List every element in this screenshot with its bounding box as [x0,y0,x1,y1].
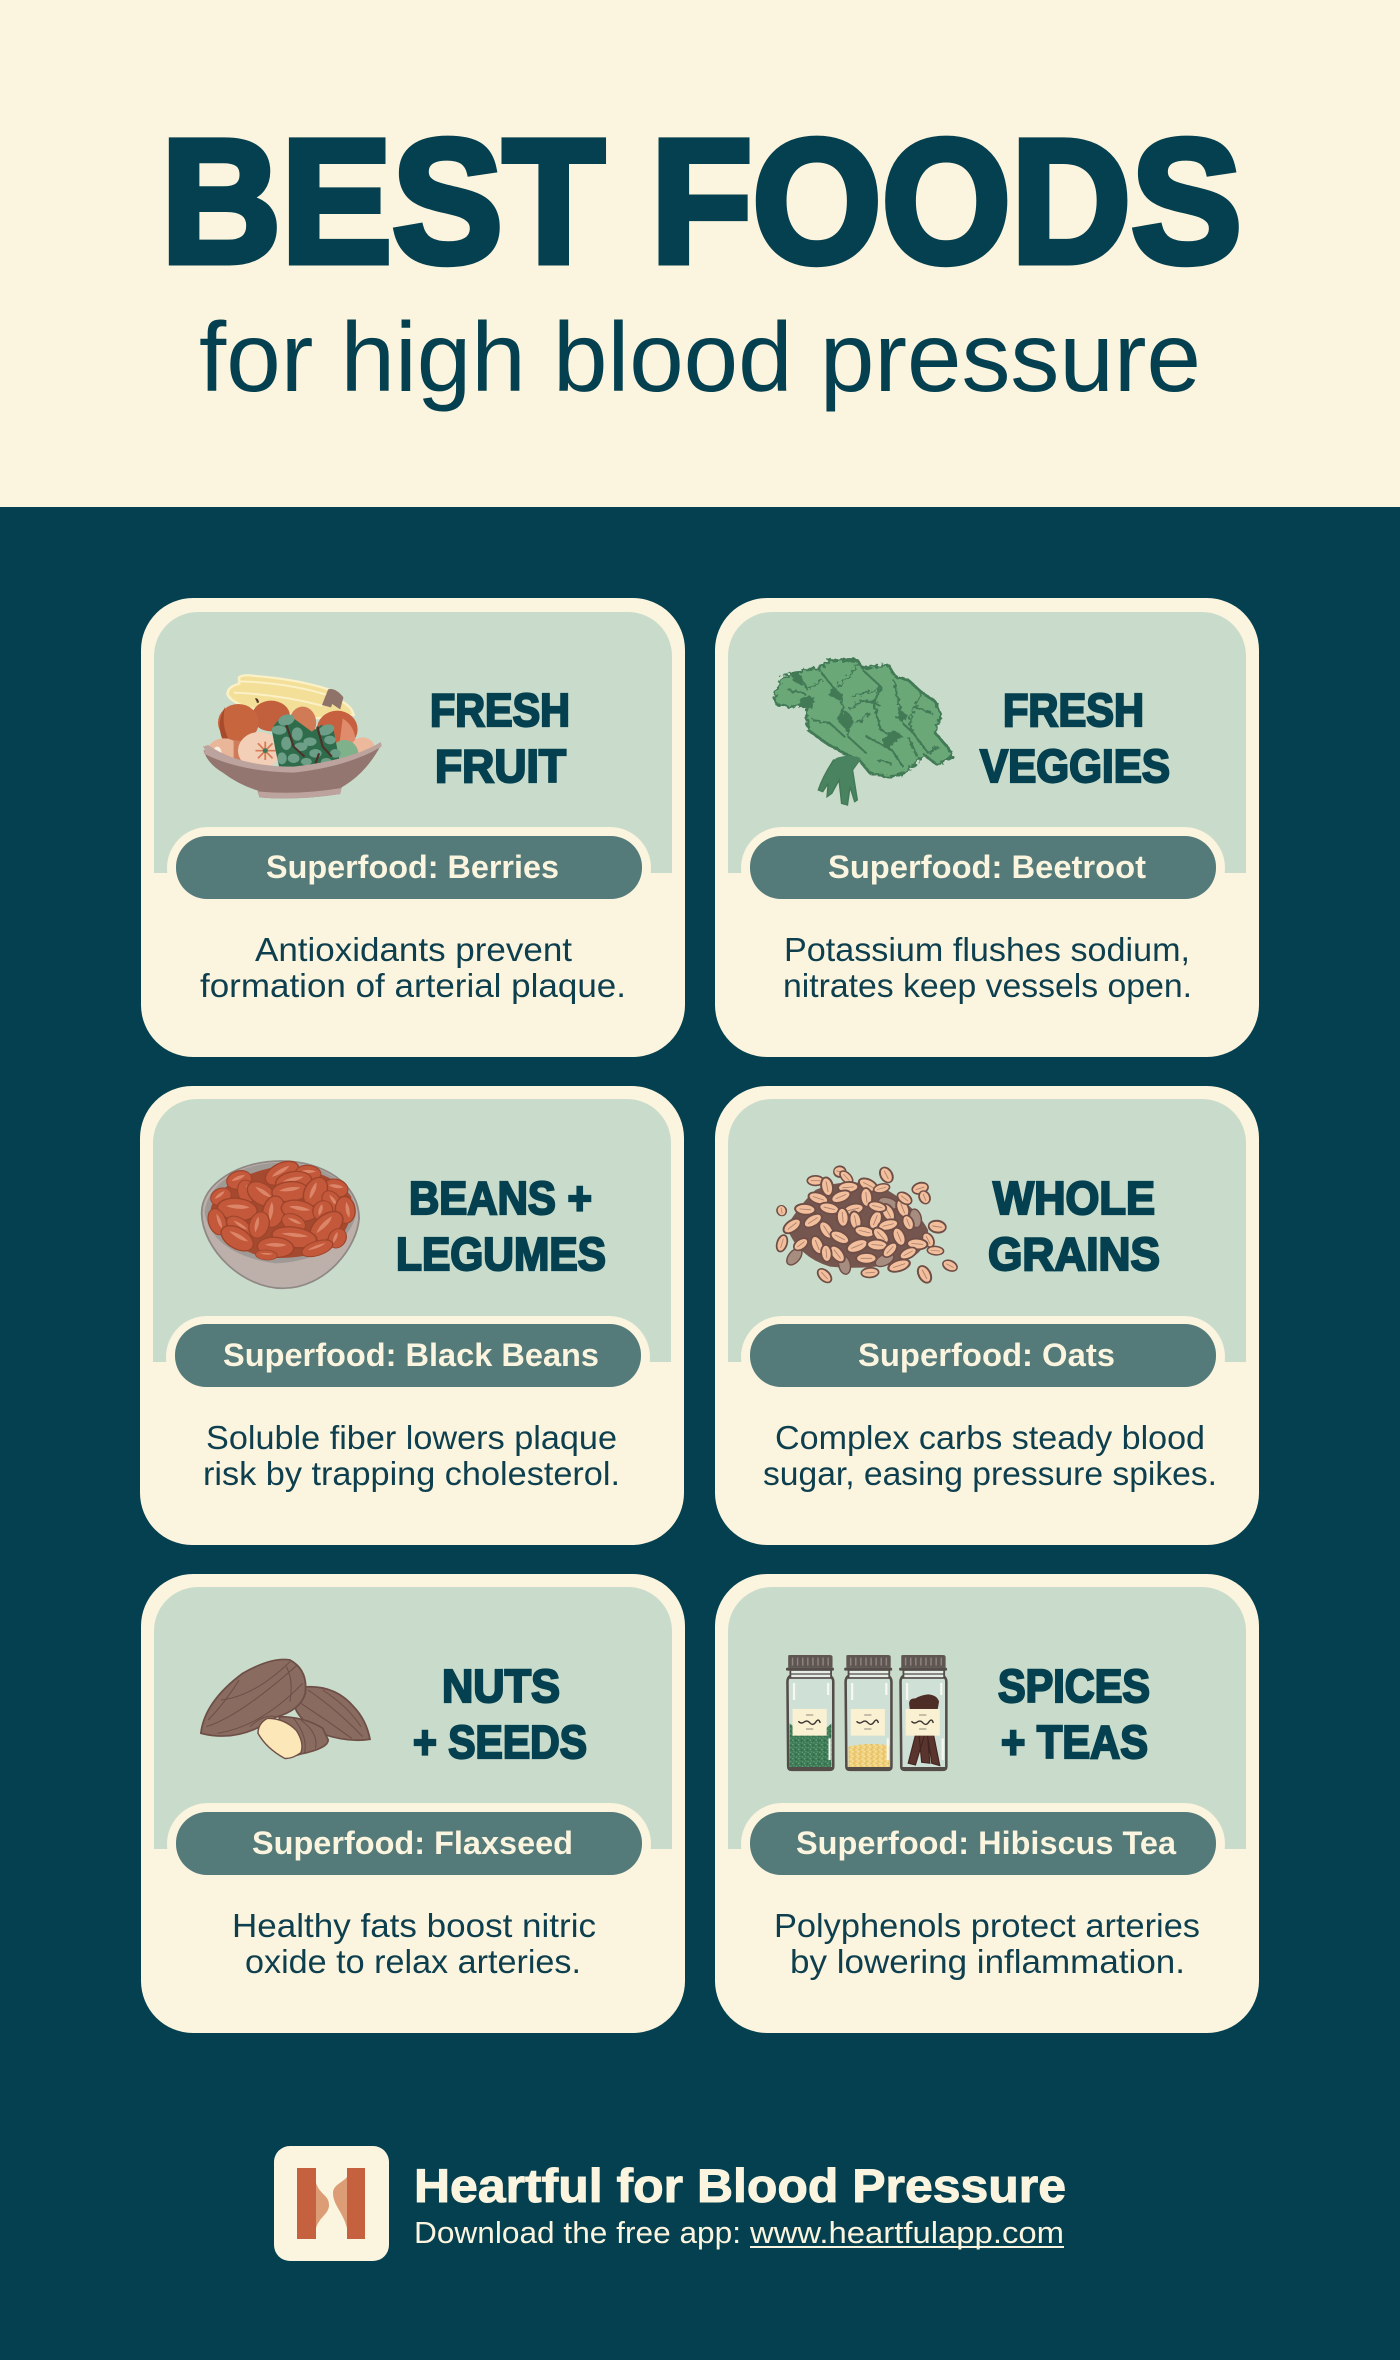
panel: nuts and seeds [141,1574,685,2033]
superfood pill [176,836,642,899]
superfood pill [750,1324,1216,1387]
description [200,931,626,1004]
icon: oat pile [775,1165,959,1285]
heading: nuts and seeds [413,1660,587,1768]
superfood pill: Superfood: Black Beans [223,1337,599,1373]
panel: fresh fruit [141,598,685,1057]
icon: app logo [274,2146,389,2261]
superfood pill [750,1812,1216,1875]
description: Healthy fats boost nitric [232,1907,596,1944]
description: Antioxidants prevent [255,931,572,968]
description [203,1419,620,1492]
app name: Heartful for Blood Pressure [414,2159,1066,2212]
heading: beans and legumes: LEGUMES [396,1228,606,1280]
superfood pill: Superfood: Hibiscus Tea [796,1825,1177,1861]
superfood pill: Superfood: Berries [266,849,559,885]
heading: whole grains: WHOLE [993,1172,1155,1224]
description [763,1419,1217,1492]
description [232,1907,596,1980]
description: formation of arterial plaque. [200,967,626,1004]
description: Soluble fiber lowers plaque [206,1419,617,1456]
description: by lowering inflammation. [790,1943,1185,1980]
heading: fresh fruit [430,684,570,792]
icon: almonds [201,1659,370,1758]
title: BEST FOODS [161,104,1242,300]
panel: beans and legumes [140,1086,684,1545]
description: Polyphenols protect arteries [774,1907,1200,1944]
heading: fresh veggies [980,684,1170,792]
footer [274,2146,1066,2261]
panel: whole grains [715,1086,1259,1545]
description: oxide to relax arteries. [245,1943,581,1980]
description: risk by trapping cholesterol. [203,1455,620,1492]
description: nitrates keep vessels open. [783,967,1192,1004]
heading: fresh fruit: FRESH [430,684,570,736]
download line [414,2215,1064,2250]
header band [0,0,1400,507]
heading: beans and legumes [396,1172,606,1280]
panel: fresh veggies [715,598,1259,1057]
description: Potassium flushes sodium, [784,931,1190,968]
icon: spice jars [786,1655,947,1770]
superfood pill: Superfood: Oats [858,1337,1115,1373]
heading: beans and legumes: BEANS + [409,1172,592,1224]
description [783,931,1192,1004]
heading: fresh veggies: VEGGIES [980,740,1170,792]
description [774,1907,1200,1980]
heading: fresh veggies: FRESH [1003,684,1144,736]
heading: nuts and seeds: + SEEDS [413,1716,587,1768]
download line: www.heartfulapp.com [749,2215,1064,2250]
heading: spices and teas: + TEAS [1001,1716,1148,1768]
download line: Download the free app: [414,2215,741,2250]
heading: whole grains: GRAINS [988,1228,1160,1280]
heading: fresh fruit: FRUIT [435,740,566,792]
icon: fruit bowl [203,675,382,798]
superfood pill: Superfood: Beetroot [828,849,1146,885]
heading: spices and teas [998,1660,1150,1768]
panel: spices and teas [715,1574,1259,2033]
description: sugar, easing pressure spikes. [763,1455,1217,1492]
heading: whole grains [988,1172,1160,1280]
icon: bean bowl [202,1156,359,1288]
heading: nuts and seeds: NUTS [442,1660,560,1712]
superfood pill: Superfood: Flaxseed [252,1825,573,1861]
description: Complex carbs steady blood [775,1419,1205,1456]
heading: spices and teas: SPICES [998,1660,1150,1712]
subtitle: for high blood pressure [199,302,1201,412]
superfood pill [176,1812,642,1875]
icon: kale bunch [774,660,952,805]
superfood pill [175,1324,641,1387]
superfood pill [750,836,1216,899]
